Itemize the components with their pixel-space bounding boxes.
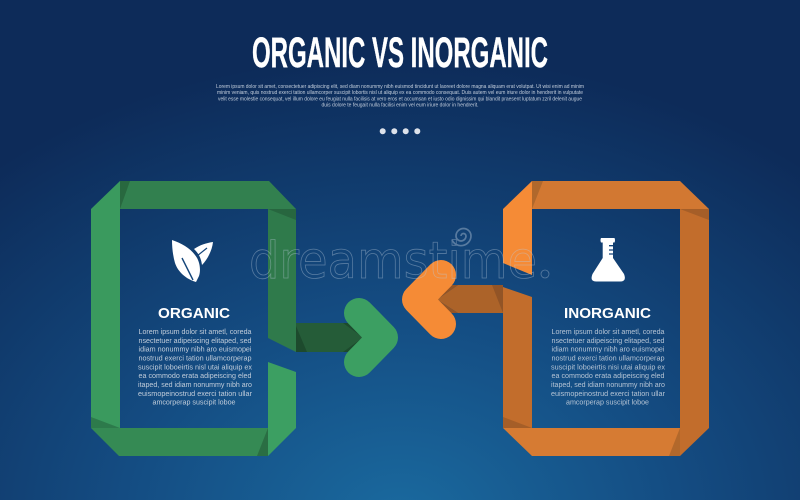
panel: inorganic bbox=[417, 181, 709, 456]
title: ORGANIC VS INORGANIC bbox=[252, 29, 548, 77]
green frame bottom band bbox=[91, 428, 268, 456]
organic body text: nostrud exerci tation ullamcorperap bbox=[138, 354, 252, 362]
green frame right upper band bbox=[268, 209, 296, 352]
inorganic body text bbox=[551, 327, 665, 407]
green frame left band bbox=[91, 181, 120, 428]
inorganic body text: idiam nonummy nibh aro euismopei bbox=[552, 345, 665, 354]
orange frame left upper band bbox=[503, 181, 532, 275]
orange frame left lower band bbox=[503, 287, 532, 428]
green frame top band bbox=[120, 181, 296, 209]
watermark: dreamstime bbox=[249, 232, 537, 291]
icon: flask bbox=[592, 238, 625, 282]
organic body text: euismopeinostrud exerci tation ullar bbox=[138, 389, 252, 398]
inorganic body text: Lorem ipsum dolor sit ametl, coreda bbox=[552, 327, 665, 336]
orange arrow bbox=[417, 275, 503, 324]
inorganic body text: euismopeinostrud exerci tation ullar bbox=[551, 389, 665, 398]
organic body text: amcorperap suscipit loboe bbox=[152, 398, 236, 407]
organic body text: ea commodo erata adipeiscing eled bbox=[138, 371, 252, 380]
heading: organic: ORGANIC bbox=[158, 305, 230, 322]
organic body text: idiam nonummy nibh aro euismopei bbox=[138, 345, 252, 354]
pagination dots bbox=[380, 128, 420, 134]
heading: inorganic: INORGANIC bbox=[564, 305, 651, 322]
organic body text bbox=[138, 327, 252, 407]
orange frame top band bbox=[532, 181, 709, 209]
inorganic body text: amcorperap suscipit loboe bbox=[566, 398, 649, 407]
inorganic body text: nostrud exerci tation ullamcorperap bbox=[552, 354, 664, 362]
icon: leaves bbox=[172, 240, 213, 282]
panel: organic bbox=[91, 181, 383, 456]
organic body text: itaped, sed idiam nonummy nibh aro bbox=[138, 380, 252, 389]
intro text block: duis dolore te feugait nulla facilisi enim vel eum iriure dolor in hendrerit. bbox=[322, 102, 478, 108]
intro text block: velit esse molestie consequat, vel illum dolore eu feugiat nulla facilisis at vero eros et accumsan et iusto odio dignissim qui blandit praesent luptatum zzril delenit augue bbox=[218, 96, 582, 102]
orange frame bottom band bbox=[503, 428, 680, 456]
intro text block bbox=[216, 84, 584, 108]
intro text block: Lorem ipsum dolor sit amet, consectetuer adipiscing elit, sed diam nonummy nibh euismod tincidunt ut laoreet dolore magna aliquam erat volutpat. Ut wisi enim ad minim bbox=[216, 84, 584, 90]
green arrow bbox=[296, 313, 383, 362]
green frame right lower band bbox=[268, 362, 296, 456]
organic body text: nsectetuer adipeiscing elitaped, sed bbox=[138, 336, 252, 345]
organic body text: Lorem ipsum dolor sit ametl, coreda bbox=[138, 327, 252, 336]
inorganic body text: suscipit loboeirtis nisi utai aliquip ex bbox=[551, 362, 665, 371]
intro text block: minim veniam, quis nostrud exerci tation ullamcorper suscipit lobortis nisl ut aliquip ex ea commodo consequat. Duis autem vel eum iriure dolor in hendrerit in vulputate bbox=[217, 90, 583, 96]
inorganic body text: nsectetuer adipeiscing elitaped, sed bbox=[552, 336, 664, 345]
inorganic body text: itaped, sed idiam nonummy nibh aro bbox=[551, 380, 665, 389]
organic body text: suscipit loboeirtis nisl utai aliquip ex bbox=[138, 362, 252, 371]
orange frame right band bbox=[680, 209, 709, 456]
inorganic body text: ea commodo erata adipeiscing eled bbox=[552, 371, 664, 380]
